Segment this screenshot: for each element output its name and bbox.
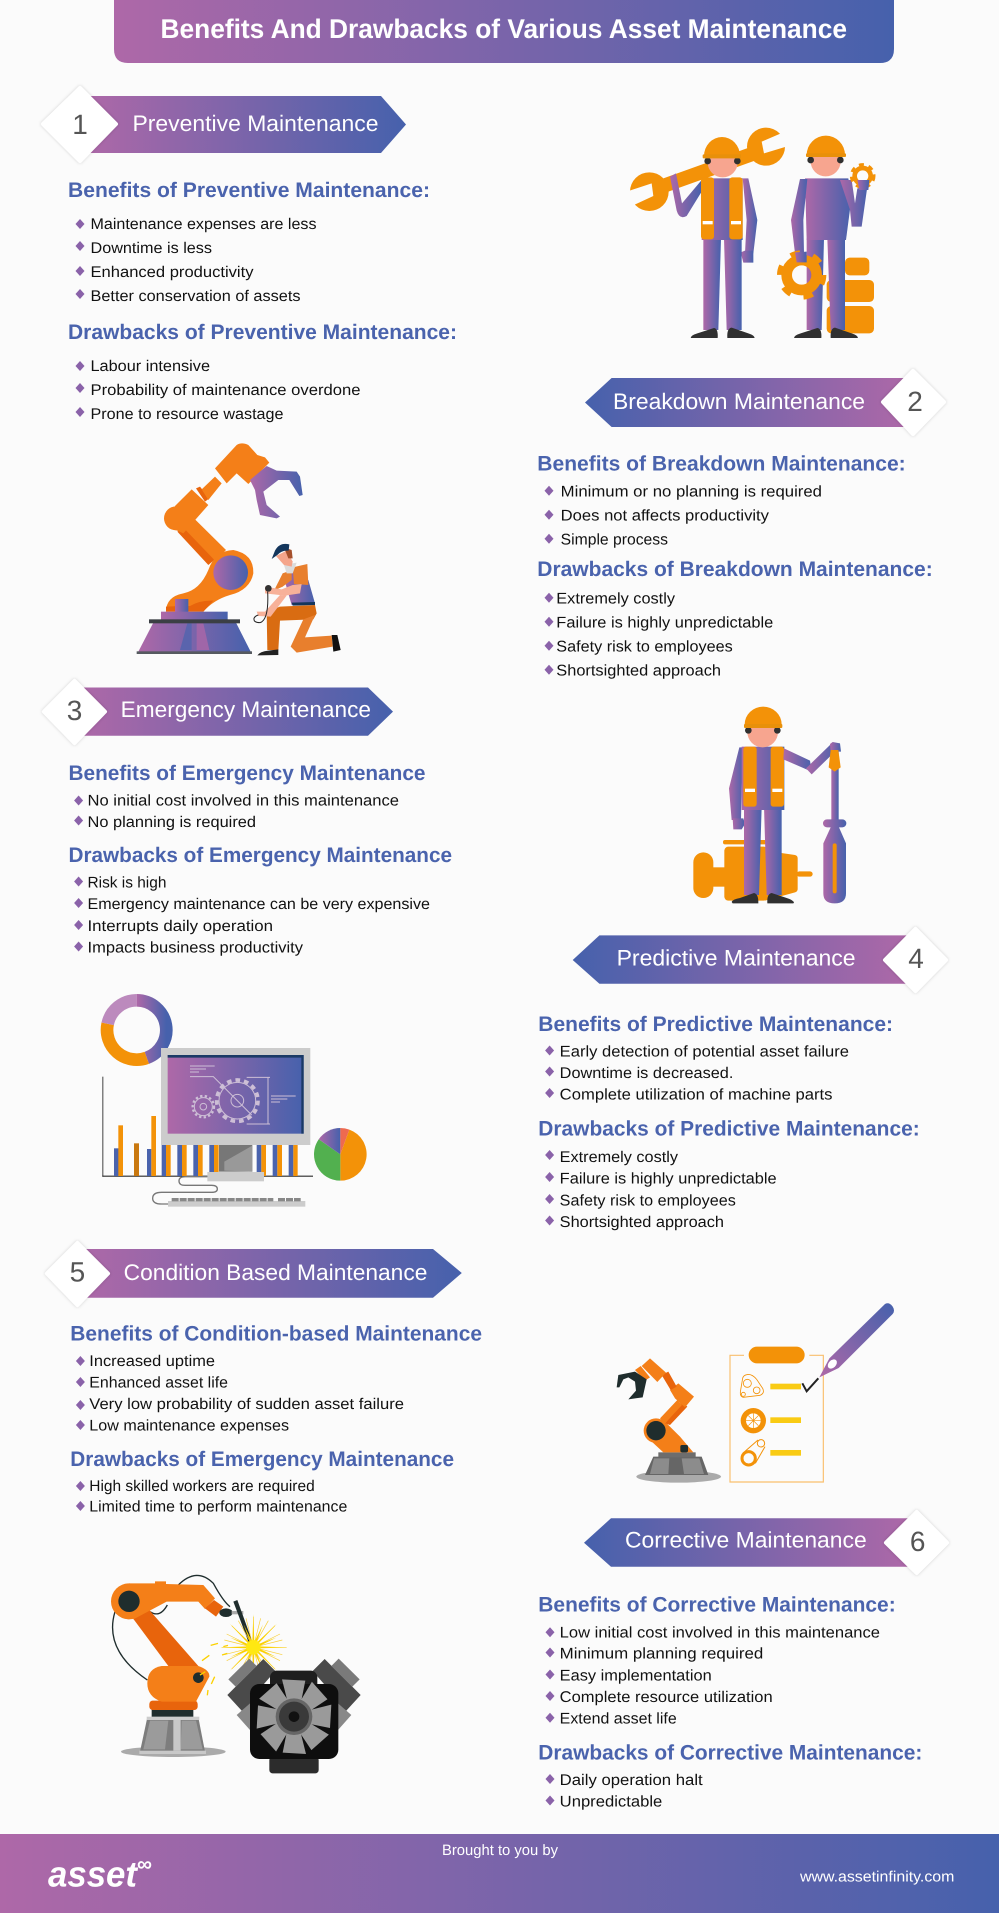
illustration: robot arm and checklist xyxy=(617,1303,894,1483)
ribbon: 4 predictive maintenance: Predictive Maintenance xyxy=(617,946,856,970)
monitor xyxy=(161,1048,310,1181)
benefits list: Low initial cost involved in this maintenance xyxy=(560,1624,880,1641)
panel: corrective maintenance xyxy=(538,1512,947,1811)
welding robot xyxy=(111,1575,252,1757)
illustration: two workers with wrench and gear xyxy=(627,128,874,338)
benefits list xyxy=(546,1624,880,1728)
heading: benefits of breakdown maintenance: Benefits of Breakdown Maintenance: xyxy=(537,453,906,476)
benefits list: Downtime is decreased. xyxy=(560,1065,733,1082)
ribbon: 5 condition based maintenance: Condition Based Maintenance xyxy=(124,1260,427,1285)
benefits list: Easy implementation xyxy=(560,1667,712,1684)
ribbon: 3 emergency maintenance: Emergency Maintenance xyxy=(121,697,371,722)
benefits list xyxy=(74,793,399,831)
benefits list: Very low probability of sudden asset failure xyxy=(89,1396,404,1413)
drawbacks list: Limited time to perform maintenance xyxy=(89,1499,347,1516)
logo: asset infinity: ∞ xyxy=(137,1853,152,1876)
benefits list: Enhanced productivity xyxy=(90,264,254,281)
benefits list xyxy=(544,484,822,549)
benefits list: No initial cost involved in this maintenance xyxy=(88,793,399,810)
drawbacks list xyxy=(544,590,773,680)
ribbon: 6 corrective maintenance: Corrective Maintenance xyxy=(625,1528,867,1553)
benefits list: Enhanced asset life xyxy=(89,1374,228,1391)
big wrench xyxy=(627,128,788,211)
illustration: analytics dashboard on monitor xyxy=(102,1000,367,1207)
ribbon: 4 predictive maintenance xyxy=(573,929,946,991)
benefits list xyxy=(76,1353,404,1435)
drawbacks list xyxy=(74,874,430,956)
drawbacks list: Failure is highly unpredictable xyxy=(556,615,773,632)
ribbon: 2 breakdown maintenance xyxy=(585,371,944,434)
robot arm xyxy=(164,443,303,612)
ribbon: 6 corrective maintenance xyxy=(584,1512,947,1573)
benefits list: Minimum planning required xyxy=(560,1646,763,1663)
heading: benefits of predictive maintenance: Benefits of Predictive Maintenance: xyxy=(538,1013,893,1036)
drawbacks list xyxy=(76,358,360,423)
benefits list: Maintenance expenses are less xyxy=(90,216,317,233)
robot base xyxy=(137,599,252,654)
benefits list: Minimum or no planning is required xyxy=(561,484,822,501)
drawbacks list: Risk is high xyxy=(88,874,166,891)
drawbacks list: Safety risk to employees xyxy=(560,1192,736,1209)
welding sparks xyxy=(200,1614,287,1695)
drawbacks list: Labour intensive xyxy=(90,358,210,375)
drawbacks list: Probability of maintenance overdone xyxy=(90,382,360,399)
benefits list: Increased uptime xyxy=(89,1353,215,1370)
ribbon: 6 corrective maintenance: 6 xyxy=(910,1526,925,1557)
drawbacks list xyxy=(546,1772,703,1811)
ribbon: 4 predictive maintenance: 4 xyxy=(908,943,924,974)
drawbacks list: Emergency maintenance can be very expensive xyxy=(88,896,430,913)
heading: benefits of emergency maintenance: Benefits of Emergency Maintenance xyxy=(68,762,426,785)
kneeling technician xyxy=(254,544,341,655)
logo: asset infinity: asset xyxy=(48,1854,139,1895)
heading: drawbacks of corrective maintenance: Drawbacks of Corrective Maintenance: xyxy=(538,1741,922,1764)
benefits list: Complete resource utilization xyxy=(560,1689,773,1706)
benefits list: Downtime is less xyxy=(90,240,212,257)
checklist clipboard xyxy=(730,1347,823,1482)
benefits list: Better conservation of assets xyxy=(90,288,301,305)
engine xyxy=(227,1659,361,1773)
drawbacks list: Prone to resource wastage xyxy=(90,406,284,423)
heading: benefits of corrective maintenance: Benefits of Corrective Maintenance: xyxy=(538,1594,896,1617)
benefits list: Extend asset life xyxy=(560,1711,677,1728)
pie chart xyxy=(314,1128,367,1181)
drawbacks list: Failure is highly unpredictable xyxy=(560,1171,777,1188)
heading: drawbacks of predictive maintenance: Drawbacks of Predictive Maintenance: xyxy=(538,1118,920,1141)
left worker xyxy=(670,137,757,338)
benefits list: Complete utilization of machine parts xyxy=(560,1087,833,1104)
panel: condition based maintenance xyxy=(47,1243,482,1516)
illustration: worker with screwdriver and motor xyxy=(693,707,846,903)
benefits list: Early detection of potential asset failure xyxy=(560,1043,849,1060)
keyboard and cable xyxy=(153,1177,305,1207)
heading: drawbacks of emergency maintenance: Drawbacks of Emergency Maintenance xyxy=(70,1448,454,1471)
benefits list: Low maintenance expenses xyxy=(89,1418,289,1435)
drawbacks list: Impacts business productivity xyxy=(88,939,303,956)
benefits list xyxy=(545,1043,849,1104)
ribbon: 5 condition based maintenance: 5 xyxy=(70,1256,85,1288)
ribbon: 3 emergency maintenance: 3 xyxy=(67,695,82,726)
small robot arm xyxy=(617,1358,721,1483)
drawbacks list: Shortsighted approach xyxy=(560,1214,724,1231)
website: www.assetinfinity.com xyxy=(799,1868,954,1885)
ribbon: 1 preventive maintenance: 1 xyxy=(72,109,88,140)
footer band xyxy=(0,1834,999,1913)
benefits list xyxy=(76,216,317,305)
benefits list: No planning is required xyxy=(88,814,256,831)
ribbon: 1 preventive maintenance xyxy=(43,88,406,161)
illustration: robot arm and kneeling technician xyxy=(137,443,341,655)
right worker with gears xyxy=(780,136,874,338)
donut chart xyxy=(107,1000,166,1060)
pencil xyxy=(819,1303,894,1377)
motor xyxy=(693,840,813,901)
heading: drawbacks of preventive maintenance: Drawbacks of Preventive Maintenance: xyxy=(68,321,457,344)
illustration: welding robot and engine xyxy=(111,1575,361,1773)
screwdriver xyxy=(823,747,846,903)
panel: breakdown maintenance xyxy=(537,371,944,680)
worker xyxy=(729,707,841,903)
drawbacks list: Daily operation halt xyxy=(560,1772,703,1789)
drawbacks list xyxy=(545,1149,777,1231)
drawbacks list: Unpredictable xyxy=(560,1794,662,1811)
ribbon: 5 condition based maintenance xyxy=(47,1243,462,1305)
ribbon: 2 breakdown maintenance: Breakdown Maintenance xyxy=(613,389,865,414)
bar chart xyxy=(102,1077,313,1177)
drawbacks list xyxy=(76,1478,347,1516)
drawbacks list: Extremely costly xyxy=(556,590,675,607)
heading: benefits of preventive maintenance: Benefits of Preventive Maintenance: xyxy=(68,179,430,202)
panel: predictive maintenance xyxy=(538,929,946,1231)
heading: benefits of condition-based maintenance: Benefits of Condition-based Maintenance xyxy=(70,1323,482,1346)
panel: emergency maintenance xyxy=(44,681,452,956)
sponsor line: Brought to you by xyxy=(442,1842,558,1859)
ribbon: 3 emergency maintenance xyxy=(44,681,393,743)
drawbacks list: Extremely costly xyxy=(560,1149,678,1166)
panel: preventive maintenance xyxy=(43,88,457,423)
drawbacks list: Shortsighted approach xyxy=(556,663,721,680)
drawbacks list: High skilled workers are required xyxy=(89,1478,315,1495)
heading: drawbacks of breakdown maintenance: Drawbacks of Breakdown Maintenance: xyxy=(537,558,933,581)
title banner: Benefits And Drawbacks of Various Asset Maintenance xyxy=(160,14,847,44)
ribbon: 1 preventive maintenance: Preventive Maintenance xyxy=(132,111,378,136)
heading: drawbacks of emergency maintenance: Drawbacks of Emergency Maintenance xyxy=(68,844,452,867)
benefits list: Simple process xyxy=(561,532,668,549)
drawbacks list: Safety risk to employees xyxy=(556,639,733,656)
ribbon: 2 breakdown maintenance: 2 xyxy=(907,386,923,417)
drawbacks list: Interrupts daily operation xyxy=(88,918,273,935)
title banner xyxy=(114,0,894,63)
benefits list: Does not affects productivity xyxy=(561,508,769,525)
